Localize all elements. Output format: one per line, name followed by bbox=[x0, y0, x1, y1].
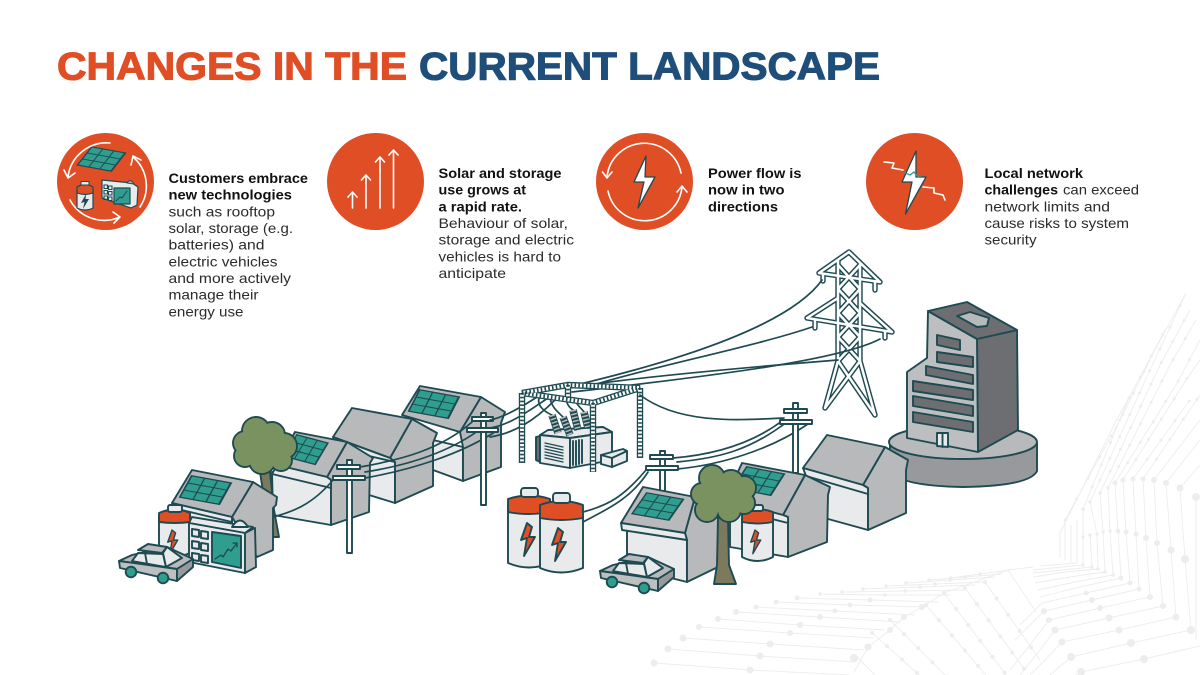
text: local network: Local network bbox=[984, 165, 1083, 181]
text: local network: can exceed bbox=[1063, 182, 1139, 198]
text: customers embrace: energy use bbox=[168, 303, 244, 319]
text: customers embrace: manage their bbox=[168, 287, 259, 303]
text: solar and storage: anticipate bbox=[438, 265, 506, 281]
title: CURRENT LANDSCAPE bbox=[419, 46, 880, 88]
plain house right bbox=[803, 435, 908, 530]
panel: local network challenges bbox=[866, 133, 1139, 248]
house with solar panel, front left bbox=[172, 470, 277, 557]
text: local network: network limits and bbox=[984, 198, 1110, 214]
home battery bbox=[159, 505, 190, 556]
distribution poles and wires, left bbox=[273, 395, 555, 553]
pole front bbox=[646, 451, 678, 493]
text: solar and storage: storage and electric bbox=[438, 232, 574, 248]
text: customers embrace: batteries) and bbox=[168, 237, 264, 253]
transmission wires bbox=[572, 280, 880, 392]
text: local network bbox=[984, 165, 1139, 248]
text: customers embrace: Customers embrace bbox=[168, 170, 308, 186]
text: customers embrace bbox=[168, 170, 308, 319]
grid batteries bbox=[508, 488, 583, 572]
text: solar and storage bbox=[438, 165, 574, 281]
panel: customers embrace new technologies bbox=[57, 133, 308, 319]
text: power flow: now in two bbox=[708, 182, 784, 198]
small battery bbox=[742, 505, 773, 561]
icon: lightning and jagged line bbox=[866, 133, 963, 230]
house with solar panel, right bbox=[725, 463, 830, 557]
text: solar and storage: Behaviour of solar, bbox=[438, 215, 568, 231]
text: power flow: Power flow is bbox=[708, 165, 802, 181]
text: customers embrace: and more actively bbox=[168, 270, 291, 286]
text: power flow: directions bbox=[708, 198, 778, 214]
text: solar and storage: vehicles is hard to bbox=[438, 248, 561, 264]
text: local network: security bbox=[984, 232, 1036, 248]
panel: solar and storage growth bbox=[327, 133, 574, 281]
text: customers embrace: new technologies bbox=[168, 187, 292, 203]
car left bbox=[119, 544, 193, 583]
background network pattern bbox=[654, 293, 1200, 675]
right pole bbox=[780, 403, 812, 473]
icon: rising arrows bbox=[327, 133, 424, 230]
house with solar panel, middle bbox=[272, 432, 373, 525]
plain house bbox=[333, 408, 437, 503]
text: customers embrace: electric vehicles bbox=[168, 253, 278, 269]
substation gantry bbox=[522, 385, 640, 472]
house with solar panel, front bbox=[621, 487, 718, 582]
battery front bbox=[540, 493, 583, 572]
text: local network: cause risks to system bbox=[984, 215, 1129, 231]
title: CHANGES IN THE bbox=[57, 46, 407, 88]
illustration: energy network scene bbox=[119, 252, 1037, 593]
transformer bbox=[536, 396, 627, 468]
transmission tower bbox=[807, 252, 892, 415]
text: customers embrace: such as rooftop bbox=[168, 203, 275, 219]
text: solar and storage: use grows at bbox=[438, 182, 526, 198]
icon: solar, battery and meter cycle bbox=[57, 133, 154, 230]
text: local network: challenges bbox=[984, 182, 1058, 198]
energy management display bbox=[189, 517, 256, 573]
panel: power flow bbox=[596, 133, 802, 230]
battery back bbox=[508, 488, 550, 568]
commercial building on base bbox=[889, 302, 1037, 487]
icon: two-way lightning bbox=[596, 133, 693, 230]
title bbox=[57, 46, 880, 88]
tree right bbox=[691, 465, 756, 584]
text: customers embrace: solar, storage (e.g. bbox=[168, 220, 293, 236]
text: power flow bbox=[708, 165, 802, 214]
car right bbox=[600, 554, 674, 593]
text: solar and storage: a rapid rate. bbox=[438, 198, 522, 214]
text: solar and storage: Solar and storage bbox=[438, 165, 562, 181]
distribution wires, right bbox=[583, 395, 808, 522]
tree left bbox=[233, 417, 297, 537]
house with solar panel, back bbox=[402, 386, 505, 481]
